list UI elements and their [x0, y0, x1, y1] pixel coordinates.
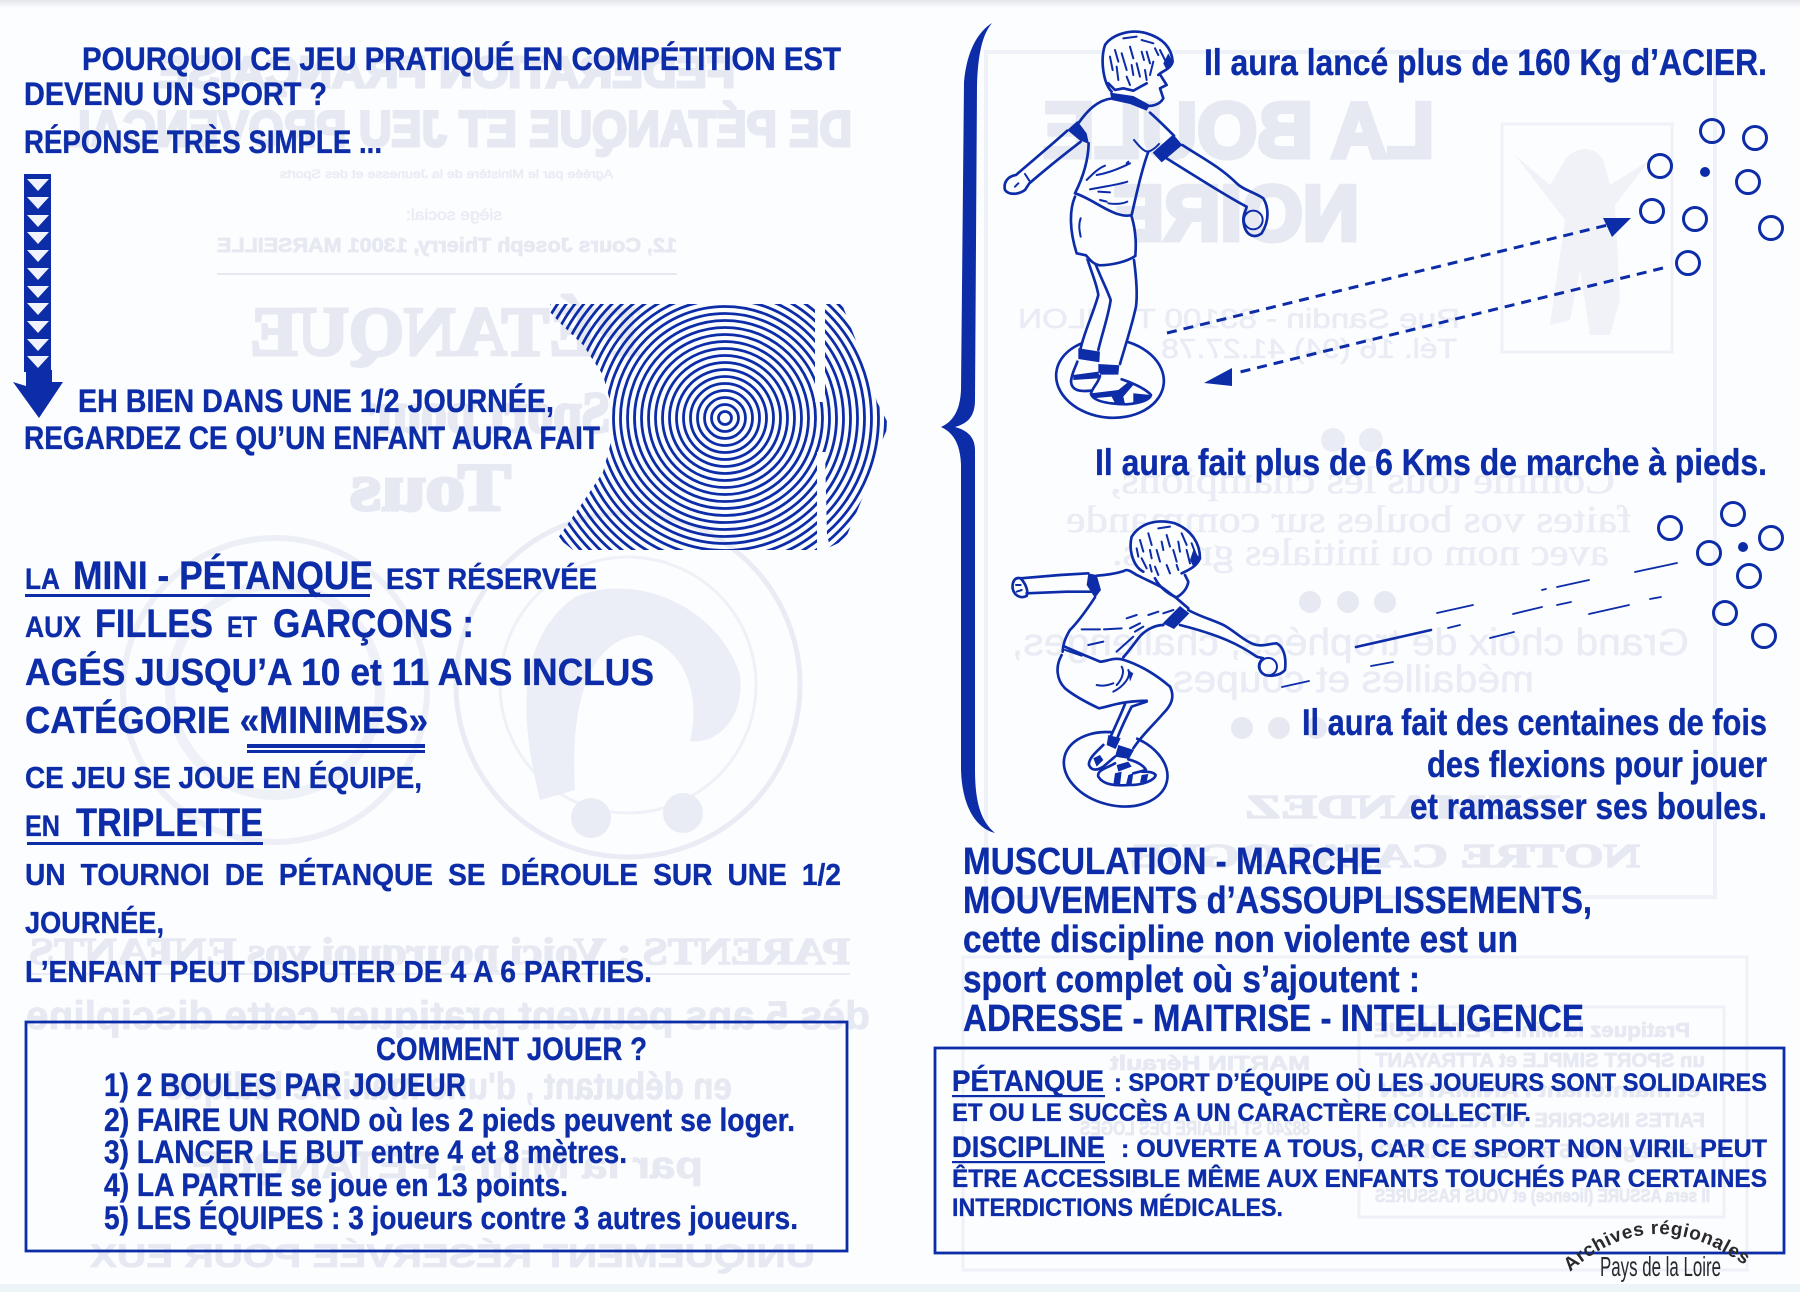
text: mini-pétanque description: LA	[25, 563, 60, 596]
show-through ghost print from reverse side: DEMANDEZ	[1245, 789, 1560, 826]
arrows: throw and return	[1167, 218, 1663, 386]
heading: question	[24, 41, 841, 160]
text: half-day intro: EH BIEN DANS UNE 1/2 JOURNÉE,	[78, 383, 554, 419]
heading: question: POURQUOI CE JEU PRATIQUÉ EN COMPÉTITION EST	[82, 41, 841, 77]
show-through ghost print from reverse side: Rue Sandin - 83100 TOULON	[1018, 303, 1460, 334]
text: mini-pétanque description: TRIPLETTE	[76, 801, 263, 845]
show-through ghost print from reverse side: dès 5 ans peuvent pratiquer cette discipline	[26, 994, 870, 1038]
show-through ghost print from reverse side: médailles et coupes	[1173, 659, 1534, 701]
panel: comment jouer	[26, 1022, 847, 1251]
show-through ghost print from reverse side: Tous	[350, 449, 511, 525]
show-through ghost print from reverse side: UNIQUEMENT RÉSERVÉE POUR EUX	[89, 1238, 815, 1274]
heading: question: DEVENU UN SPORT ?	[24, 76, 327, 112]
show-through ghost print from reverse side: NOIRE	[1112, 169, 1359, 257]
icon: concentric target	[550, 304, 887, 550]
show-through ghost print from reverse side: Agréée par le Ministère de la Jeunesse et des Sports	[280, 167, 613, 181]
text: flexions	[1302, 702, 1767, 827]
text: mini-pétanque description: CATÉGORIE «MINIMES»	[25, 698, 428, 742]
panel: comment jouer: 5) LES ÉQUIPES : 3 joueurs contre 3 autres joueurs.	[104, 1200, 798, 1236]
show-through ghost print from reverse side: 88240 ST HILAIRE DES LOGES	[1080, 1118, 1310, 1140]
illustration: boy throwing	[1005, 32, 1267, 423]
show-through ghost print from reverse side: Sport pour	[370, 380, 610, 445]
text: summary of benefits	[963, 841, 1592, 1040]
show-through ghost print from reverse side: FAITES INSCRIRE VOTRE ENFANT	[1375, 1110, 1705, 1132]
panel: comment jouer: 4) LA PARTIE se joue en 13 points.	[104, 1167, 568, 1203]
show-through ghost print from reverse side: MARTIN Hérault	[1110, 1053, 1310, 1075]
brace	[941, 23, 995, 833]
show-through ghost print from reverse side: Pratiquez la Mini - PÉTANQUE	[1374, 1019, 1690, 1042]
show-through ghost print from reverse side: siège social:	[406, 207, 502, 224]
panel: definitions: INTERDICTIONS MÉDICALES.	[952, 1193, 1283, 1222]
stamp: archives régionales: Archives régionales	[1566, 1220, 1748, 1272]
icon: boules cluster middle	[1658, 502, 1782, 648]
text: mini-pétanque description: EST RÉSERVÉE	[386, 562, 597, 596]
panel: definitions: PÉTANQUE	[952, 1064, 1104, 1098]
show-through ghost print from reverse side: PÉTANQUE	[250, 294, 640, 371]
text: mini-pétanque description: CE JEU SE JOUE EN ÉQUIPE,	[25, 760, 422, 795]
illustration: boy crouching	[1013, 521, 1285, 817]
panel: comment jouer: COMMENT JOUER ?	[376, 1031, 647, 1067]
panel: definitions: DISCIPLINE	[952, 1131, 1105, 1164]
text: mini-pétanque description: AGÉS JUSQU’A 10 et 11 ANS INCLUS	[25, 650, 654, 694]
show-through ghost print from reverse side: FEDERATION FRANÇAISE	[158, 48, 735, 97]
text: summary of benefits: sport complet où s’ajoutent :	[963, 959, 1420, 1001]
show-through ghost print from reverse side: avec nom ou initiales gravés.	[1112, 532, 1609, 574]
show-through ghost print from reverse side: Comme tous les champions,	[1110, 460, 1615, 502]
show-through ghost print from reverse side: un SPORT SIMPLE et ATTRAYANT	[1375, 1050, 1705, 1072]
text: mini-pétanque description: GARÇONS :	[273, 602, 474, 646]
show-through ghost print from reverse side: en débutant , d'une manière ludique	[165, 1066, 732, 1108]
show-through ghost print from reverse side: LA BOULE	[1043, 86, 1434, 174]
motion lines	[1282, 563, 1677, 687]
text: summary of benefits: ADRESSE - MAITRISE - INTELLIGENCE	[963, 998, 1584, 1040]
show-through ghost print from reverse side: NOTRE CATALOGUE	[1130, 838, 1640, 875]
text: mini-pétanque description: EN	[25, 810, 60, 843]
text: mini-pétanque description: JOURNÉE,	[25, 905, 164, 940]
text: summary of benefits: cette discipline non violente est un	[963, 919, 1518, 961]
text: mini-pétanque description: FILLES	[95, 602, 213, 646]
panel: definitions: ET OU LE SUCCÈS A UN CARACTÈRE COLLECTIF.	[952, 1098, 1531, 1127]
panel: definitions: : OUVERTE A TOUS, CAR CE SPORT NON VIRIL PEUT	[1121, 1135, 1767, 1163]
show-through ghost print from reverse side: par la Mini - PÉTANQUE	[190, 1143, 703, 1187]
panel: definitions: : SPORT D’ÉQUIPE OÙ LES JOUEURS SONT SOLIDAIRES	[1114, 1067, 1767, 1097]
text: summary of benefits: MOUVEMENTS d’ASSOUPLISSEMENTS,	[963, 880, 1592, 922]
show-through ghost print from reverse side: Tél. 16 (94) 41.27.78	[1161, 333, 1457, 364]
show-through ghost print from reverse side: et maintenant l'ANIMATION	[1380, 1080, 1700, 1102]
show-through ghost print from reverse side: 12, Cours Joseph Thierry, 13001 MARSEILLE	[217, 235, 677, 257]
text: half-day intro	[24, 383, 600, 456]
icon: boules cluster top	[1640, 120, 1782, 274]
show-through ghost print from reverse side: dès l'âge de 5 ans à la F.F.P.J.P.	[1375, 1141, 1705, 1163]
text: half-day intro: REGARDEZ CE QU’UN ENFANT AURA FAIT	[24, 420, 600, 456]
stamp: archives régionales: Pays de la Loire	[1600, 1251, 1721, 1282]
show-through ghost print from reverse side: Grand choix de trophées, challenges,	[1012, 622, 1689, 664]
text: mini-pétanque description: UN TOURNOI DE PÉTANQUE SE DÉROULE SUR UNE 1/2	[25, 857, 841, 892]
text: summary of benefits: MUSCULATION - MARCHE	[963, 841, 1382, 883]
show-through ghost print from reverse side: DE PÉTANQUE ET JEU PROVENCAL	[63, 101, 852, 157]
text: mini-pétanque description: ET	[227, 611, 257, 644]
show-through ghost print from reverse side: PARENTS : Voici pourquoi vos ENFANTS	[29, 931, 850, 973]
heading: question: RÉPONSE TRÈS SIMPLE ...	[24, 124, 382, 160]
panel: comment jouer: 2) FAIRE UN ROND où les 2 pieds peuvent se loger.	[104, 1102, 795, 1138]
icon: patterned down arrow	[13, 174, 63, 418]
text: mini-pétanque description: MINI - PÉTANQUE	[73, 553, 373, 598]
show-through ghost print from reverse side: Il sera ASSURÉ (licence) et VOUS RASSURES	[1375, 1185, 1710, 1206]
panel: definitions: ÊTRE ACCESSIBLE MÊME AUX ENFANTS TOUCHÉS PAR CERTAINES	[952, 1163, 1767, 1193]
text: mini-pétanque description	[25, 553, 841, 989]
text: mini-pétanque description: L’ENFANT PEUT DISPUTER DE 4 A 6 PARTIES.	[25, 954, 652, 989]
show-through ghost print from reverse side: faites vos boules sur commande	[1066, 499, 1632, 541]
panel: comment jouer: 3) LANCER LE BUT entre 4 et 8 mètres.	[104, 1134, 627, 1170]
panel: comment jouer: 1) 2 BOULES PAR JOUEUR	[104, 1067, 466, 1103]
text: mini-pétanque description: AUX	[25, 611, 81, 644]
panel: definitions	[935, 1048, 1784, 1253]
